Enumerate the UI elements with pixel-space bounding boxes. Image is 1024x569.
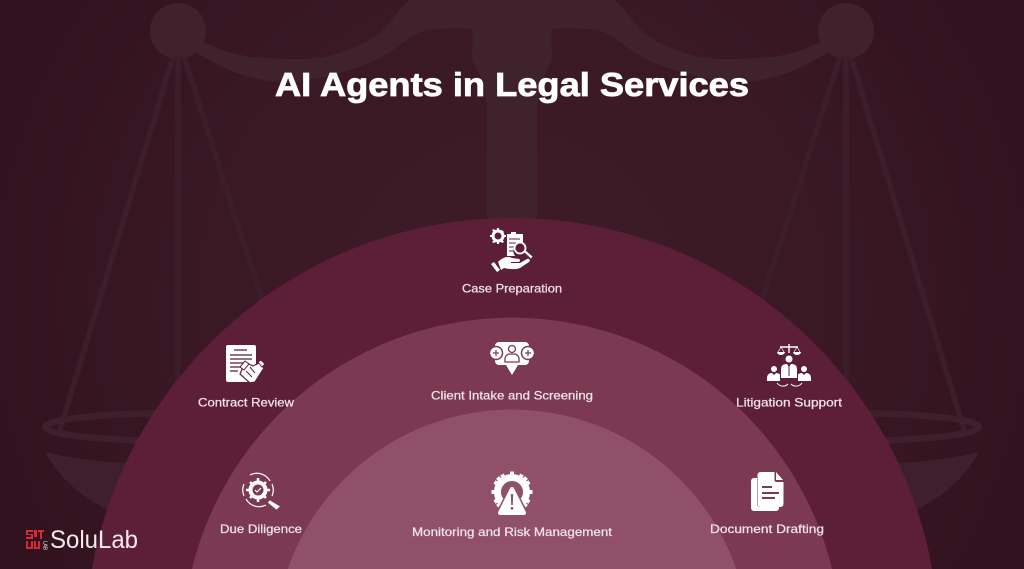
label: Contract Review bbox=[198, 396, 294, 410]
label: Monitoring and Risk Management bbox=[412, 525, 613, 539]
icon: gear with warning triangle bbox=[492, 472, 532, 518]
icon: stacked documents bbox=[751, 472, 784, 511]
logo mark: LAB bbox=[42, 541, 48, 550]
outer arc bbox=[92, 218, 932, 569]
middle arc bbox=[192, 318, 832, 569]
inner arc bbox=[288, 410, 736, 569]
item: due diligence bbox=[220, 473, 302, 536]
label: Document Drafting bbox=[710, 522, 824, 536]
item: litigation support bbox=[736, 344, 843, 410]
icon: scales and three people bbox=[767, 344, 811, 386]
item: client intake and screening bbox=[431, 342, 593, 402]
icon: gear, clipboard and hand bbox=[490, 228, 532, 272]
item: monitoring and risk management bbox=[412, 472, 613, 539]
icon: speech bubble with person bbox=[490, 342, 534, 375]
icon: gear with magnifier bbox=[243, 473, 279, 509]
label: Due Diligence bbox=[220, 522, 302, 536]
title: AI Agents in Legal Services bbox=[275, 66, 749, 103]
item: contract review bbox=[198, 345, 294, 410]
logo: SoluLab bbox=[26, 526, 138, 554]
item: case preparation bbox=[462, 228, 562, 296]
icon: contract and handshake bbox=[226, 345, 265, 383]
item: document drafting bbox=[710, 472, 824, 536]
label: Case Preparation bbox=[462, 282, 562, 296]
label: Litigation Support bbox=[736, 396, 843, 410]
label: Client Intake and Screening bbox=[431, 388, 593, 402]
logo wordmark: SoluLab bbox=[50, 526, 138, 554]
